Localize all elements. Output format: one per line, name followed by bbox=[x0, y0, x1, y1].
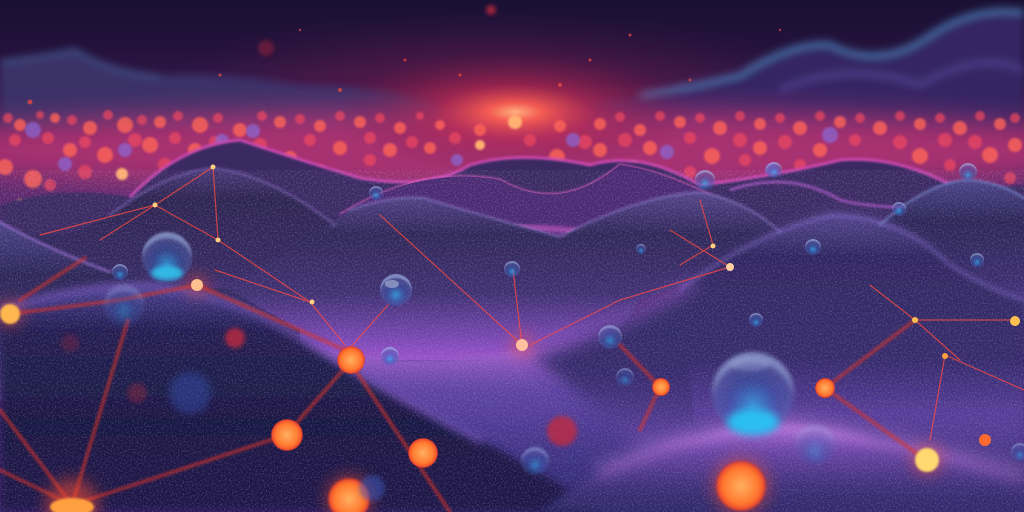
node halos bbox=[0, 275, 941, 512]
sky red glow bbox=[190, 0, 790, 130]
floating sparks bbox=[28, 29, 781, 104]
bubble: large right bbox=[712, 352, 794, 435]
hill: bottom right mound bbox=[540, 424, 1024, 512]
crest highlights bbox=[0, 168, 1024, 475]
hill: back right bbox=[880, 180, 1024, 320]
dim background nodes bbox=[61, 5, 577, 446]
horizon sun glow bbox=[335, 50, 695, 174]
hill: back left bbox=[0, 168, 340, 320]
hill: right foreground bbox=[530, 215, 1024, 512]
hill: left shoulder bbox=[0, 222, 300, 400]
distant mountains right bbox=[590, 11, 1024, 130]
hill: left foreground bbox=[0, 285, 600, 512]
network lines bbox=[0, 167, 1024, 512]
bubble: upper left bbox=[142, 232, 192, 282]
hill: centre ridge bbox=[215, 192, 780, 360]
distant mountains left bbox=[0, 48, 440, 130]
particle grain texture bbox=[0, 170, 1024, 512]
horizon bokeh band bbox=[0, 50, 1024, 207]
hill: right foreground sharp crest bbox=[680, 215, 1024, 480]
large orange orbs bbox=[716, 461, 766, 511]
glass bubbles bbox=[104, 162, 1024, 501]
bubble: centre bbox=[380, 274, 412, 306]
small bubbles bbox=[104, 162, 1024, 501]
mid-distance ripples bbox=[0, 140, 1024, 260]
hill: lower purple band bbox=[280, 345, 760, 512]
